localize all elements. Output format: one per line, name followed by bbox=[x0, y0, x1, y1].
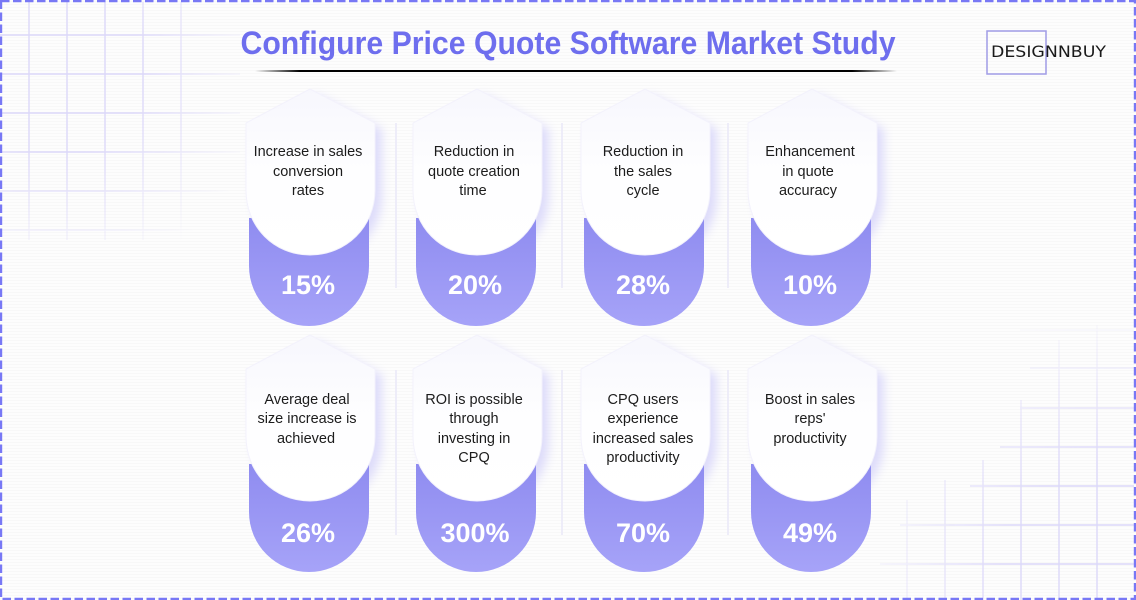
card: 28% sales cycle: Reduction in bbox=[603, 144, 683, 160]
card: 49% reps productivity bbox=[748, 335, 884, 572]
card: 15% sales conversion: rates bbox=[292, 183, 324, 199]
card: 20% quote creation time bbox=[413, 89, 549, 326]
card: 26% average deal size: Average deal bbox=[264, 392, 350, 408]
card: 15% sales conversion: Increase in sales bbox=[254, 144, 362, 160]
card: 300% ROI: ROI is possible bbox=[425, 392, 523, 408]
card: 26% average deal size: size increase is bbox=[257, 411, 357, 427]
card: 26% average deal size: 26% bbox=[281, 518, 335, 548]
top-left grid decoration bbox=[0, 2, 240, 240]
card: 28% sales cycle: the sales bbox=[614, 164, 672, 180]
card: 300% ROI bbox=[413, 335, 549, 572]
card: 70% sales productivity: CPQ users bbox=[608, 392, 678, 408]
card: 49% reps productivity: productivity bbox=[773, 431, 847, 447]
card: 300% ROI: CPQ bbox=[458, 450, 490, 466]
card: 26% average deal size bbox=[246, 335, 382, 572]
card: 20% quote creation time: Reduction in bbox=[434, 144, 514, 160]
bottom-right grid decoration bbox=[880, 325, 1134, 600]
card: 70% sales productivity: 70% bbox=[616, 518, 670, 548]
card: 49% reps productivity: 49% bbox=[783, 518, 837, 548]
logo bbox=[987, 31, 1106, 74]
card: 15% sales conversion bbox=[246, 89, 382, 326]
card: 70% sales productivity bbox=[581, 335, 717, 572]
card: 70% sales productivity: productivity bbox=[606, 450, 680, 466]
dividers bbox=[396, 123, 728, 535]
card: 70% sales productivity: increased sales bbox=[593, 431, 693, 447]
card: 10% quote accuracy bbox=[748, 89, 884, 326]
card: 26% average deal size: achieved bbox=[277, 431, 335, 447]
title: Configure Price Quote Software Market Study bbox=[240, 25, 896, 61]
card: 15% sales conversion: 15% bbox=[281, 270, 335, 300]
card: 28% sales cycle: cycle bbox=[626, 183, 660, 199]
card: 300% ROI: through bbox=[449, 411, 499, 427]
card: 49% reps productivity: Boost in sales bbox=[765, 392, 855, 408]
card: 20% quote creation time: quote creation bbox=[428, 164, 520, 180]
card: 300% ROI: investing in bbox=[438, 431, 510, 447]
card: 10% quote accuracy: Enhancement bbox=[765, 144, 855, 160]
card: 70% sales productivity: experience bbox=[608, 411, 678, 427]
card: 10% quote accuracy: 10% bbox=[783, 270, 837, 300]
card: 300% ROI: 300% bbox=[440, 518, 510, 548]
card: 20% quote creation time: time bbox=[459, 183, 487, 199]
card: 49% reps productivity: reps' bbox=[795, 411, 826, 427]
card: 15% sales conversion: conversion bbox=[273, 164, 343, 180]
card: 28% sales cycle: 28% bbox=[616, 270, 670, 300]
logo: DESIGNNBUY bbox=[991, 42, 1106, 61]
card: 28% sales cycle bbox=[581, 89, 717, 326]
card: 10% quote accuracy: in quote bbox=[782, 164, 834, 180]
title underline bbox=[255, 70, 897, 72]
card: 20% quote creation time: 20% bbox=[448, 270, 502, 300]
card: 10% quote accuracy: accuracy bbox=[779, 183, 838, 199]
